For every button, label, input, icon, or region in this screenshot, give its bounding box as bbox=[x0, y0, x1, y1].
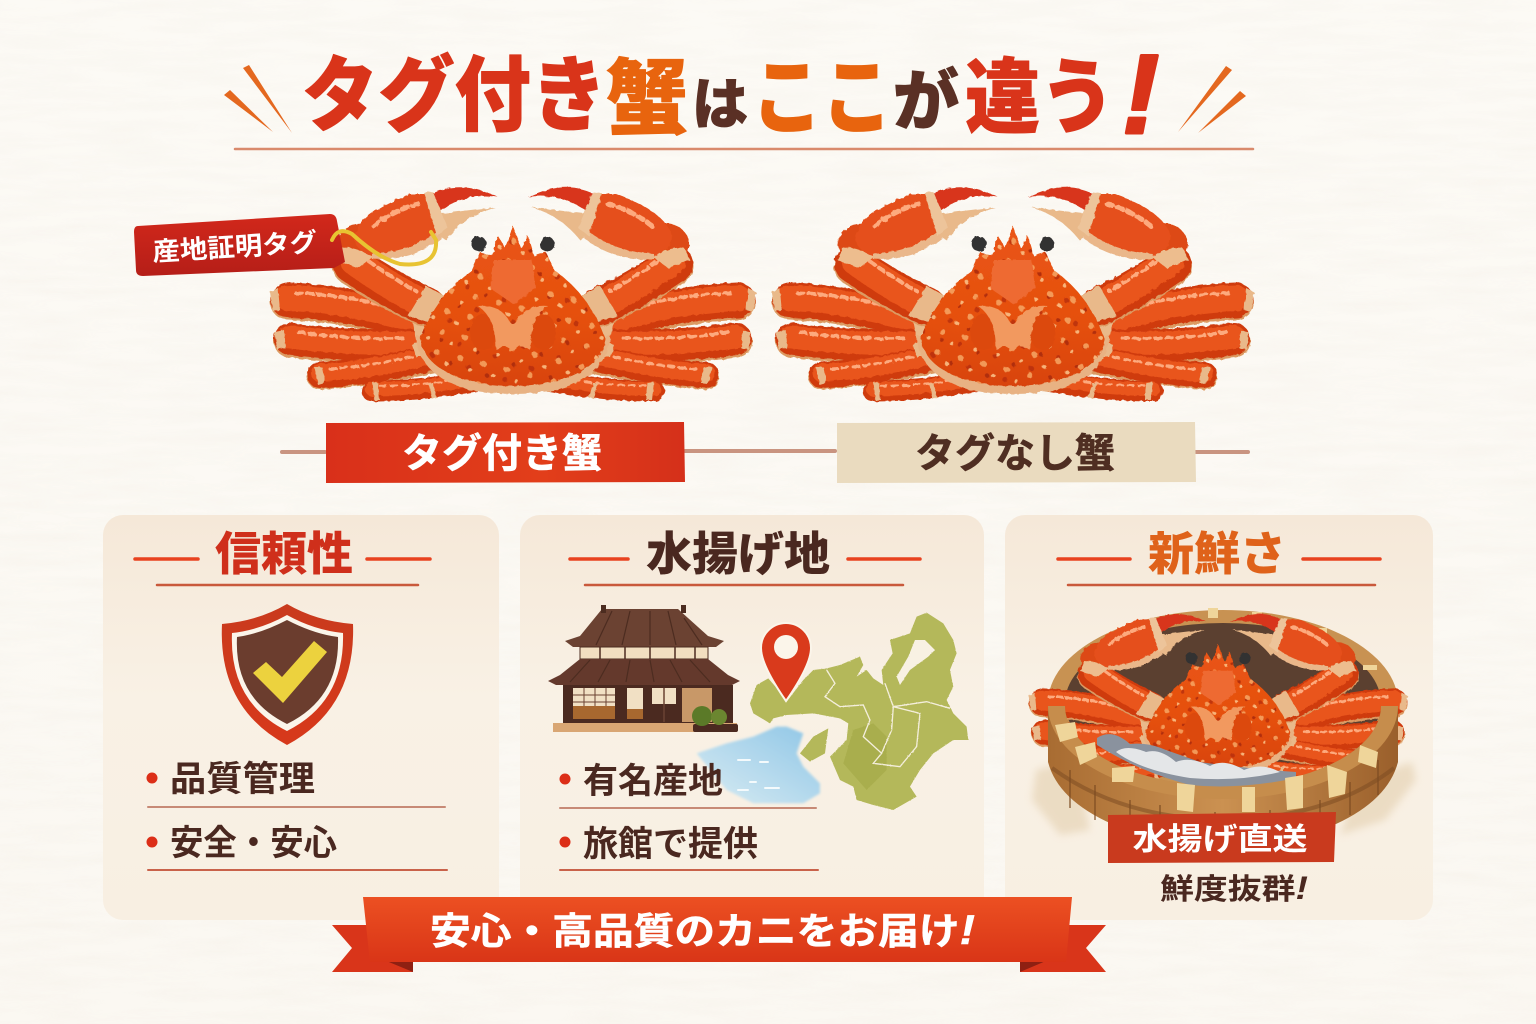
bullet: served at ryokan: 旅館で提供 bbox=[583, 825, 758, 864]
title: ! bbox=[1122, 32, 1159, 157]
title: は bbox=[692, 73, 748, 136]
panel: landing port bbox=[520, 515, 984, 920]
label: untagged crab bbox=[837, 422, 1196, 483]
bullet: quality control: 品質管理 bbox=[170, 760, 315, 799]
icon: shield with check bbox=[222, 604, 353, 745]
title: 違う bbox=[965, 53, 1115, 144]
badge: direct from port: 水揚げ直送 bbox=[1132, 822, 1308, 857]
bullet: safety: 安全・安心 bbox=[170, 824, 337, 863]
title: タグ付き bbox=[302, 51, 607, 142]
banner text: 安心・高品質のカニをお届け ! bbox=[430, 906, 975, 953]
tag string bbox=[332, 231, 436, 264]
title: 蟹 bbox=[606, 54, 688, 145]
panel: freshness bbox=[1005, 515, 1433, 920]
icon: location pin bbox=[761, 623, 811, 701]
label: tagged crab bbox=[326, 422, 685, 483]
badge: direct from port bbox=[1108, 812, 1336, 863]
tag text: 産地証明タグ bbox=[152, 227, 318, 267]
bullet: famous production area: 有名産地 bbox=[583, 762, 723, 801]
crab: tagged bbox=[270, 187, 756, 400]
heading: landing port: 水揚げ地 bbox=[646, 528, 830, 580]
origin certificate tag bbox=[134, 214, 436, 276]
title: が bbox=[893, 64, 959, 138]
sea bbox=[697, 727, 820, 803]
map of region bbox=[750, 613, 968, 810]
heading: freshness: 新鮮さ bbox=[1148, 528, 1286, 580]
title: ここ bbox=[752, 51, 892, 145]
ribbon banner bbox=[332, 897, 1106, 972]
illustration: wooden tub with crab on ice bbox=[1029, 608, 1416, 838]
crab: untagged bbox=[772, 187, 1254, 400]
icon: ryokan building bbox=[548, 605, 740, 732]
heading: reliability: 信頼性 bbox=[215, 528, 353, 580]
panel: reliability bbox=[103, 515, 499, 920]
caption: outstanding freshness: 鮮度抜群 ! bbox=[1160, 870, 1308, 906]
title accent rays right bbox=[1178, 66, 1246, 133]
title bbox=[302, 32, 1159, 157]
title accent rays left bbox=[224, 65, 292, 133]
label: tagged crab: タグ付き蟹 bbox=[402, 432, 602, 476]
label: untagged crab: タグなし蟹 bbox=[915, 432, 1115, 476]
